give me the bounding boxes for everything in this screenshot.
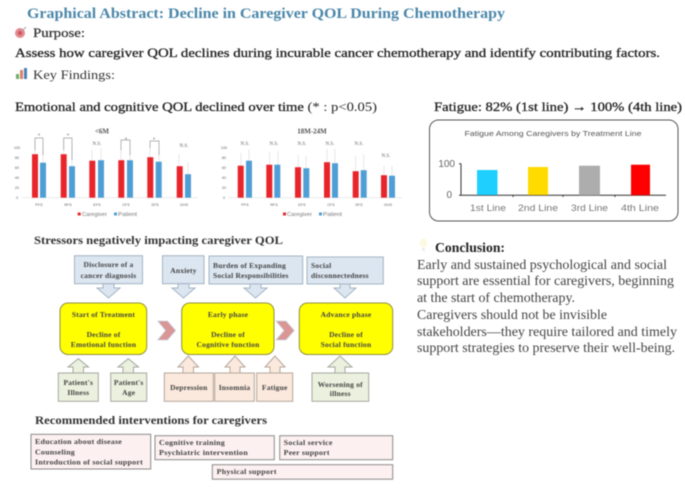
bar chart: under 6 months: * [67,134,70,139]
factor: depression: Depression [170,383,208,392]
stressor: burden: Social Responsibilities [213,271,289,280]
bar chart: under 6 months: CFS [122,203,130,207]
bar chart: under 6 months: <6M [95,128,109,136]
intervention: cognitive: Cognitive training [159,438,225,447]
bar chart: fatigue by treatment line: 3rd Line [571,203,608,214]
bar chart: 18 to 24 months: 100 [221,146,227,150]
factor: worsening: illness [330,389,351,398]
bar chart: under 6 months: Patient [118,212,138,218]
bar chart: under 6 months: 100 [14,146,20,150]
heading: stressors: Stressors negatively impacting caregiver QOL [34,233,283,247]
purpose heading: Purpose: [33,25,85,40]
bar chart: under 6 months: 80 [15,156,19,160]
factor: illness [58,359,98,401]
intervention: social: Peer support [284,448,330,457]
bar chart: 18 to 24 months: PFS [241,203,249,207]
factor: age: Age [122,388,136,397]
stressor: social disconnectedness: Social [311,261,331,270]
phase: advance: Advance phase [321,310,372,319]
factor: illness: Patient's [63,378,93,387]
bar chart: under 6 months: 40 [15,176,19,180]
bar chart: 18 to 24 months: 20 [222,186,226,190]
factor: worsening: Worsening of [318,380,363,389]
bar chart: 18 to 24 months [221,128,402,218]
conclusion text: Early and sustained psychological and social [417,258,667,273]
phase: early [182,303,274,354]
bar chart: under 6 months: 0 [16,196,18,200]
bar chart: fatigue by treatment line: Fatigue Among Caregivers by Treatment Line [464,129,642,138]
stressor: social disconnectedness [307,257,383,298]
bar chart: 18 to 24 months: 80 [222,156,226,160]
intervention: social [280,436,393,460]
factor: age: Patient's [114,378,144,387]
factor: fatigue: Fatigue [262,383,288,392]
bar chart: 18 to 24 months: N.S. [355,142,363,147]
arrow: chevron [276,321,294,340]
bar chart: under 6 months [14,128,198,218]
bar chart: under 6 months: * [153,138,156,143]
bar chart: under 6 months: GHS [180,203,189,207]
factor: worsening [312,356,369,401]
heading: interventions: Recommended interventions for caregivers [35,413,267,427]
finding heading: fatigue: Fatigue: 82% (1st line) → 100% (4th line) [434,99,682,114]
bar chart: 18 to 24 months: N.S. [326,142,334,147]
intervention: physical: Physical support [217,467,277,476]
bar chart: under 6 months: EFS [93,203,101,207]
bar chart: under 6 months: 60 [15,166,19,170]
icon: bar chart [16,68,27,79]
intervention: education [31,434,151,469]
phase: early: Decline of [211,330,245,339]
phase: advance [299,303,393,354]
bar chart: under 6 months: N.S. [93,142,101,147]
bar chart: 18 to 24 months: N.S. [382,154,390,159]
stressor: anxiety: Anxiety [170,266,197,275]
bar chart: 18 to 24 months: GHS [384,203,393,207]
bar chart: 18 to 24 months: N.S. [241,142,249,147]
bar chart: 18 to 24 months: 60 [222,166,226,170]
bar chart: fatigue by treatment line [430,120,678,221]
phase: advance: Decline of [329,330,363,339]
factor: depression [164,356,213,401]
intervention: physical [212,465,393,479]
bar chart: fatigue by treatment line: 2nd Line [518,203,558,214]
factor: age [111,359,147,401]
phase: early: Cognitive function [197,340,260,349]
intervention: education: Counseling [35,447,75,456]
bar chart: under 6 months: 20 [15,186,19,190]
bar chart: 18 to 24 months: EFS [298,203,306,207]
bar chart: under 6 months: PFS [35,203,43,207]
arrow: chevron [158,321,176,340]
stressor: burden: Burden of Expanding [213,261,286,270]
conclusion text: stakeholders—they require tailored and timely [417,325,677,340]
bar chart: 18 to 24 months: RFS [270,203,278,207]
bar chart: under 6 months: SFS [151,203,159,207]
bar chart: 18 to 24 months: Caregiver [287,212,312,218]
stressor: disclosure: Disclosure of a [84,260,134,269]
bar chart: under 6 months: * [125,138,128,143]
purpose text: Assess how caregiver QOL declines during incurable cancer chemotherapy and identify contributing factors. [15,45,660,60]
phase: advance: Social function [321,340,372,349]
title: Graphical Abstract: Decline in Caregiver QOL During Chemotherapy [27,6,506,22]
bar chart: 18 to 24 months: N.S. [270,142,278,147]
finding heading: QOL over time: Emotional and cognitive QOL declined over time (* : p<0.05) [15,99,377,114]
bar chart: 18 to 24 months: 0 [223,196,225,200]
conclusion heading: Conclusion: [435,240,505,255]
intervention: education: Education about disease [35,437,122,446]
factor: insomnia: Insomnia [219,383,250,392]
intervention: education: Introduction of social support [35,457,143,466]
factor: insomnia [215,356,254,401]
stressor: social disconnectedness: disconnectedness [311,271,369,280]
bar chart: 18 to 24 months: SFS [355,203,363,207]
stressor: disclosure: cancer diagnosis [81,271,136,280]
icon: target [15,27,26,38]
bar chart: under 6 months: * [38,134,41,139]
bar chart: fatigue by treatment line: 0 [446,190,452,201]
conclusion text: support strategies to preserve their well-being. [417,341,675,356]
bar chart: fatigue by treatment line: 1st Line [470,203,506,214]
bar chart: fatigue by treatment line: 4th Line [621,203,659,214]
factor: fatigue [257,356,293,401]
bar chart: 18 to 24 months: 40 [222,176,226,180]
bar chart: under 6 months: RFS [64,203,72,207]
conclusion text: support are essential for caregivers, beginning [417,274,674,289]
conclusion text [417,258,677,356]
phase: start of treatment: Decline of [87,330,121,339]
icon: light bulb [420,238,427,251]
stressor: burden [209,256,303,298]
bar chart: under 6 months: N.S. [180,144,188,149]
intervention: social: Social service [284,438,333,447]
factor: illness: Illness [67,388,89,397]
bar chart: fatigue by treatment line: 100 [438,159,455,170]
stressor: anxiety [162,256,204,298]
phase: start of treatment: Start of Treatment [72,310,135,319]
phase: early: Early phase [208,310,249,319]
intervention: cognitive: Psychiatric intervention [159,448,249,457]
flow diagram [58,256,393,401]
bar chart: 18 to 24 months: N.S. [298,142,306,147]
phase: start of treatment: Emotional function [71,340,137,349]
bar chart: 18 to 24 months: 18M-24M [297,128,327,136]
phase: start of treatment [60,303,147,354]
bar chart: under 6 months: Caregiver [82,212,107,218]
conclusion text: at the start of chemotherapy. [417,291,575,306]
bar chart: 18 to 24 months: Patient [323,212,343,218]
intervention: cognitive [155,436,274,460]
conclusion text: Caregivers should not be invisible [417,308,607,323]
key findings heading: Key Findings: [33,67,115,82]
stressor: disclosure [74,256,142,298]
bar chart: 18 to 24 months: CFS [327,203,335,207]
